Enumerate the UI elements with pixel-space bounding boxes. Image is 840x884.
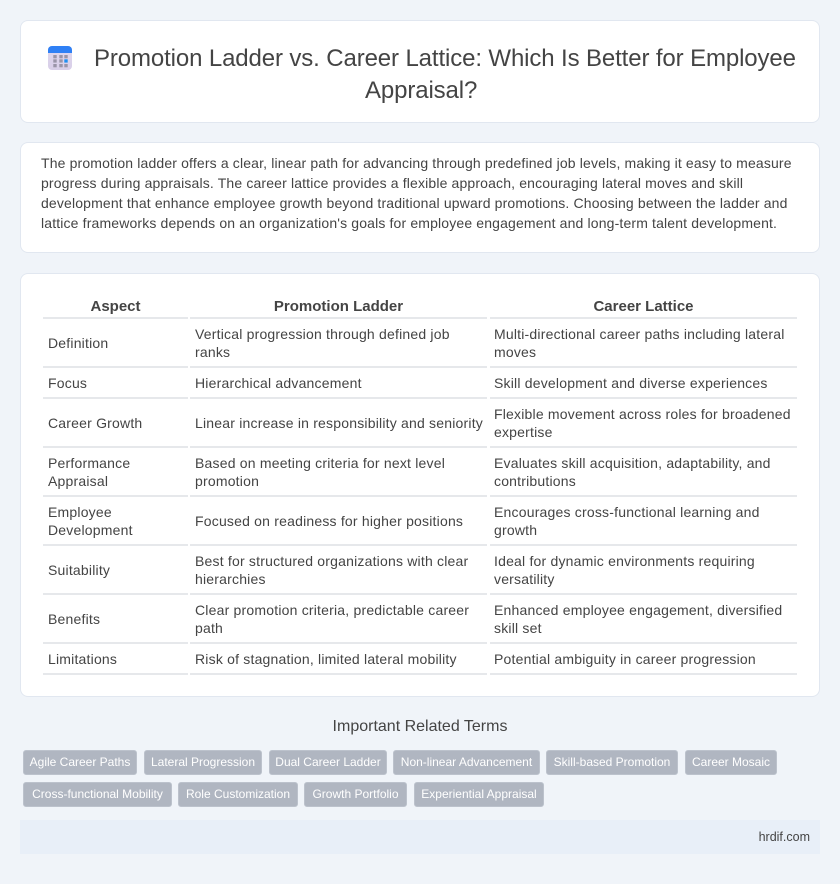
row: employee development: growth xyxy=(494,522,537,538)
row: employee development: Employee xyxy=(48,504,112,520)
row: definition: moves xyxy=(494,344,536,360)
row: career growth: Flexible movement across roles for broadened xyxy=(494,406,791,422)
tag xyxy=(414,782,544,807)
row: suitability: Suitability xyxy=(48,562,110,578)
tag: Growth Portfolio xyxy=(312,787,399,801)
intro text: The promotion ladder offers a clear, linear path for advancing through predefined job levels, making it easy to measure xyxy=(41,155,792,171)
row: benefits: skill set xyxy=(494,620,542,636)
tag xyxy=(393,750,540,775)
row: employee development xyxy=(48,504,760,538)
related terms heading: Important Related Terms xyxy=(333,718,507,735)
intro text xyxy=(41,155,792,231)
tag: Agile Career Paths xyxy=(30,755,130,769)
tag xyxy=(546,750,678,775)
row: performance appraisal xyxy=(48,455,771,489)
row: benefits xyxy=(48,602,782,636)
tag: Experiential Appraisal xyxy=(421,787,537,801)
row: definition xyxy=(48,326,785,360)
row: performance appraisal: Appraisal xyxy=(48,473,108,489)
title xyxy=(94,45,796,104)
row: suitability: Ideal for dynamic environments requiring xyxy=(494,553,755,569)
row: career growth: expertise xyxy=(494,424,553,440)
row: suitability: versatility xyxy=(494,571,555,587)
tag: Career Mosaic xyxy=(692,755,770,769)
tag xyxy=(304,782,407,807)
title: Appraisal? xyxy=(365,77,477,104)
row: performance appraisal: promotion xyxy=(195,473,259,489)
related term tags xyxy=(23,750,777,807)
tag: Non-linear Advancement xyxy=(401,755,532,769)
tag xyxy=(685,750,777,775)
tag: Role Customization xyxy=(186,787,290,801)
tag xyxy=(144,750,262,775)
row: performance appraisal: contributions xyxy=(494,473,576,489)
intro text: lattice frameworks depends on an organization's goals for employee engagement and long-term talent development. xyxy=(41,215,777,231)
intro text: progress during appraisals. The career lattice provides a flexible approach, encouraging lateral moves and skill xyxy=(41,175,743,191)
row: limitations: Risk of stagnation, limited lateral mobility xyxy=(195,651,457,667)
tag xyxy=(269,750,387,775)
intro text: development that enhance employee growth beyond traditional upward promotions. Choosing between the ladder and xyxy=(41,195,788,211)
tag: Cross-functional Mobility xyxy=(32,787,163,801)
table header: aspect: Aspect xyxy=(90,298,141,315)
tag: Dual Career Ladder xyxy=(275,755,381,769)
row: benefits: Enhanced employee engagement, diversified xyxy=(494,602,782,618)
row: employee development: Encourages cross-functional learning and xyxy=(494,504,760,520)
tag xyxy=(23,750,137,775)
table header: career lattice: Career Lattice xyxy=(593,298,694,315)
footer source: hrdif.com xyxy=(759,830,810,844)
comparison table panel xyxy=(20,273,820,697)
row: focus xyxy=(48,375,768,391)
row: employee development: Development xyxy=(48,522,133,538)
row: definition: ranks xyxy=(195,344,230,360)
row: definition: Vertical progression through defined job xyxy=(195,326,450,342)
row: suitability xyxy=(48,553,755,587)
row: career growth xyxy=(48,406,791,440)
header panel xyxy=(20,20,820,123)
row: definition: Definition xyxy=(48,335,108,351)
intro panel xyxy=(20,142,820,253)
row: limitations: Limitations xyxy=(48,651,117,667)
row: focus: Hierarchical advancement xyxy=(195,375,362,391)
table header: promotion ladder: Promotion Ladder xyxy=(274,298,403,315)
title: Promotion Ladder vs. Career Lattice: Which Is Better for Employee xyxy=(94,45,796,72)
row: suitability: Best for structured organizations with clear xyxy=(195,553,468,569)
tag xyxy=(178,782,298,807)
row: focus: Focus xyxy=(48,375,87,391)
row: performance appraisal: Performance xyxy=(48,455,130,471)
tag: Lateral Progression xyxy=(151,755,255,769)
row: limitations: Potential ambiguity in career progression xyxy=(494,651,756,667)
footer bar xyxy=(20,820,820,854)
row: focus: Skill development and diverse experiences xyxy=(494,375,768,391)
tag: Skill-based Promotion xyxy=(554,755,670,769)
icon: calendar xyxy=(48,46,72,70)
row: suitability: hierarchies xyxy=(195,571,266,587)
tag xyxy=(23,782,172,807)
row: benefits: Clear promotion criteria, predictable career xyxy=(195,602,469,618)
row: limitations xyxy=(48,651,756,667)
row: benefits: path xyxy=(195,620,223,636)
row: definition: Multi-directional career paths including lateral xyxy=(494,326,785,342)
row: benefits: Benefits xyxy=(48,611,100,627)
row: career growth: Linear increase in responsibility and seniority xyxy=(195,415,483,431)
row: performance appraisal: Evaluates skill acquisition, adaptability, and xyxy=(494,455,771,471)
row: performance appraisal: Based on meeting criteria for next level xyxy=(195,455,445,471)
row: employee development: Focused on readiness for higher positions xyxy=(195,513,463,529)
row: career growth: Career Growth xyxy=(48,415,142,431)
